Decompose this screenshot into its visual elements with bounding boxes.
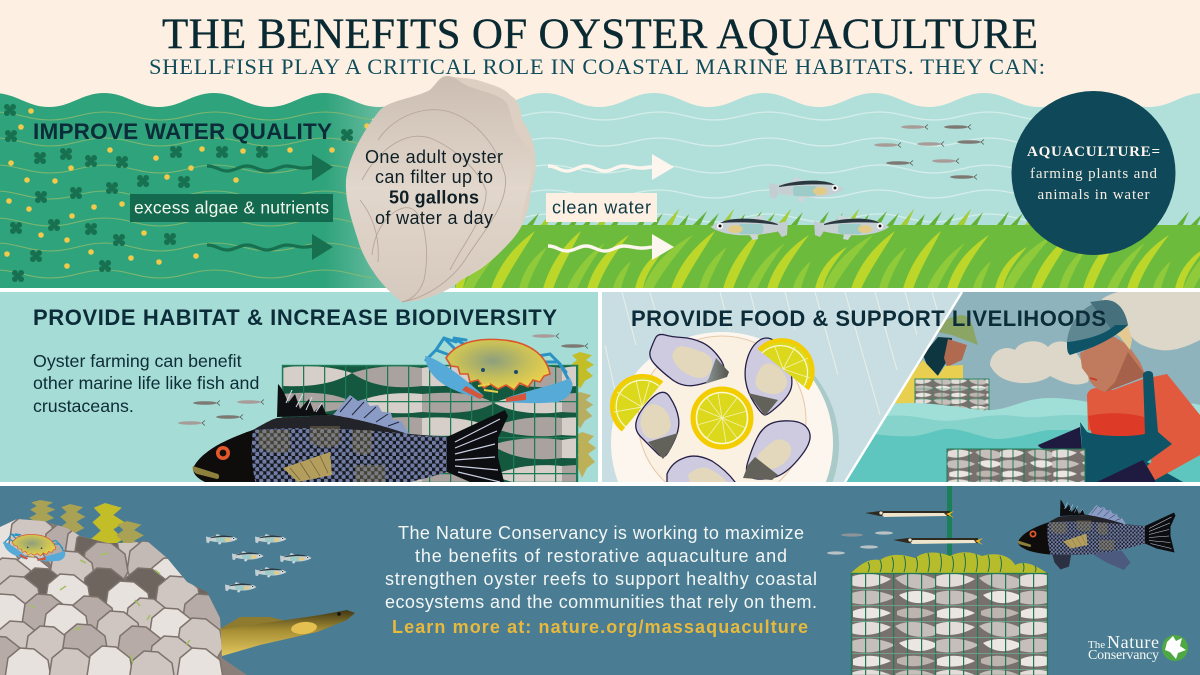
arrow: dirty water upper [207, 154, 333, 181]
water background [0, 90, 1200, 288]
logo: The Nature Conservancy: Conservancy [1088, 648, 1159, 663]
footer message: strengthen oyster reefs to support healthy coastal [385, 569, 817, 589]
header band [0, 0, 1200, 110]
title: THE BENEFITS OF OYSTER AQUACULTURE [162, 11, 1038, 58]
seagrass bed [455, 205, 1200, 288]
clouds [990, 290, 1200, 384]
oyster shell [346, 76, 533, 302]
panel background [0, 292, 598, 482]
label: clean water [546, 193, 657, 222]
needlefish upper [865, 511, 954, 518]
scene: oyster farmers [840, 290, 1200, 483]
footer message: the benefits of restorative aquaculture and [415, 546, 787, 566]
silver fish [711, 177, 889, 240]
oyster illustration and filter text [346, 76, 536, 302]
seaweed mound on cage [851, 552, 1047, 573]
panel: conservancy footer [0, 486, 1200, 675]
shell contours [360, 110, 506, 302]
diagonal divider [845, 292, 962, 482]
oyster three [636, 392, 679, 459]
label: excess algae and nutrients: excess algae & nutrients [134, 198, 329, 218]
oyster one [650, 334, 729, 386]
needlefish lower [893, 538, 983, 545]
eel [217, 610, 355, 656]
tiny fish [178, 334, 588, 426]
arrow: clean water upper [548, 154, 674, 180]
oyster shadow [405, 76, 536, 302]
reef crab [3, 534, 65, 561]
heading: improve water quality: IMPROVE WATER QUALITY [33, 119, 332, 144]
logo: The Nature Conservancy: The [1088, 639, 1105, 651]
nutrient dots [4, 108, 370, 269]
oyster two [745, 338, 792, 416]
panel: provide habitat and increase biodiversity [0, 292, 598, 482]
call to action link: Learn more at: nature.org/massaquaculture [392, 617, 808, 637]
body text: habitat: other marine life like fish and [33, 373, 259, 393]
footer message [385, 523, 817, 612]
plate [610, 332, 839, 482]
oyster five [666, 455, 736, 482]
body text: habitat: Oyster farming can benefit [33, 351, 242, 371]
silver fish school [206, 534, 312, 592]
logo: The Nature Conservancy [1088, 632, 1188, 663]
arrow: clean water lower [548, 234, 674, 260]
subtitle: SHELLFISH PLAY A CRITICAL ROLE IN COASTAL MARINE HABITATS. THEY CAN: [149, 54, 1045, 79]
kelp on reef [29, 500, 144, 562]
black sea bass [192, 384, 508, 482]
callout: aquaculture definition: animals in water [1038, 187, 1150, 203]
sky [917, 292, 1200, 410]
blue crab [425, 338, 572, 403]
school of tiny fish [874, 124, 984, 180]
panel: improve water quality [0, 90, 1200, 288]
tiny grey fish [827, 531, 893, 555]
water waves [840, 398, 1200, 482]
panel: provide food and support livelihoods [602, 292, 1200, 482]
current lines right [372, 111, 1032, 222]
algae clusters [4, 104, 353, 282]
body text: habitat: crustaceans. [33, 396, 134, 416]
heading: food and livelihoods: PROVIDE FOOD & SUPPORT LIVELIHOODS [631, 306, 1106, 331]
lemon wedge upper [759, 340, 813, 389]
oyster filter text: One adult oyster [365, 147, 503, 167]
small cage held by woman [914, 378, 990, 410]
table background [602, 292, 1200, 482]
large cage held by man [947, 449, 1085, 483]
oyster reef [0, 514, 250, 675]
oyster cage with seaweed [851, 573, 1048, 675]
label: excess algae and nutrients [130, 194, 333, 222]
label: clean water: clean water [552, 198, 651, 218]
arrow: dirty water lower [207, 234, 333, 260]
oyster cage [282, 365, 578, 482]
lemon slice whole [693, 389, 751, 447]
panel background [0, 486, 1200, 675]
logo: The Nature Conservancy: Nature [1107, 632, 1159, 652]
oyster text bold figure: 50 gallons [389, 188, 479, 208]
oyster four [743, 421, 810, 480]
footer message: The Nature Conservancy is working to maximize [398, 523, 804, 543]
black sea bass small [1018, 500, 1176, 570]
oyster text line 2: can filter up to [375, 167, 493, 187]
callout: aquaculture definition: AQUACULTURE= [1027, 144, 1160, 160]
callout: aquaculture definition: farming plants and [1030, 166, 1158, 182]
cage post [947, 486, 952, 562]
oyster text line 4: of water a day [375, 208, 493, 228]
man farmer [1038, 300, 1200, 482]
current lines left [0, 112, 372, 278]
woman farmer [894, 315, 978, 404]
lemon wedge lower [612, 376, 662, 430]
callout: aquaculture definition [1012, 91, 1176, 255]
heading: habitat: PROVIDE HABITAT & INCREASE BIODIVERSITY [33, 305, 557, 330]
footer message: ecosystems and the communities that rely on them. [385, 592, 817, 612]
kelp behind cage [570, 352, 596, 478]
